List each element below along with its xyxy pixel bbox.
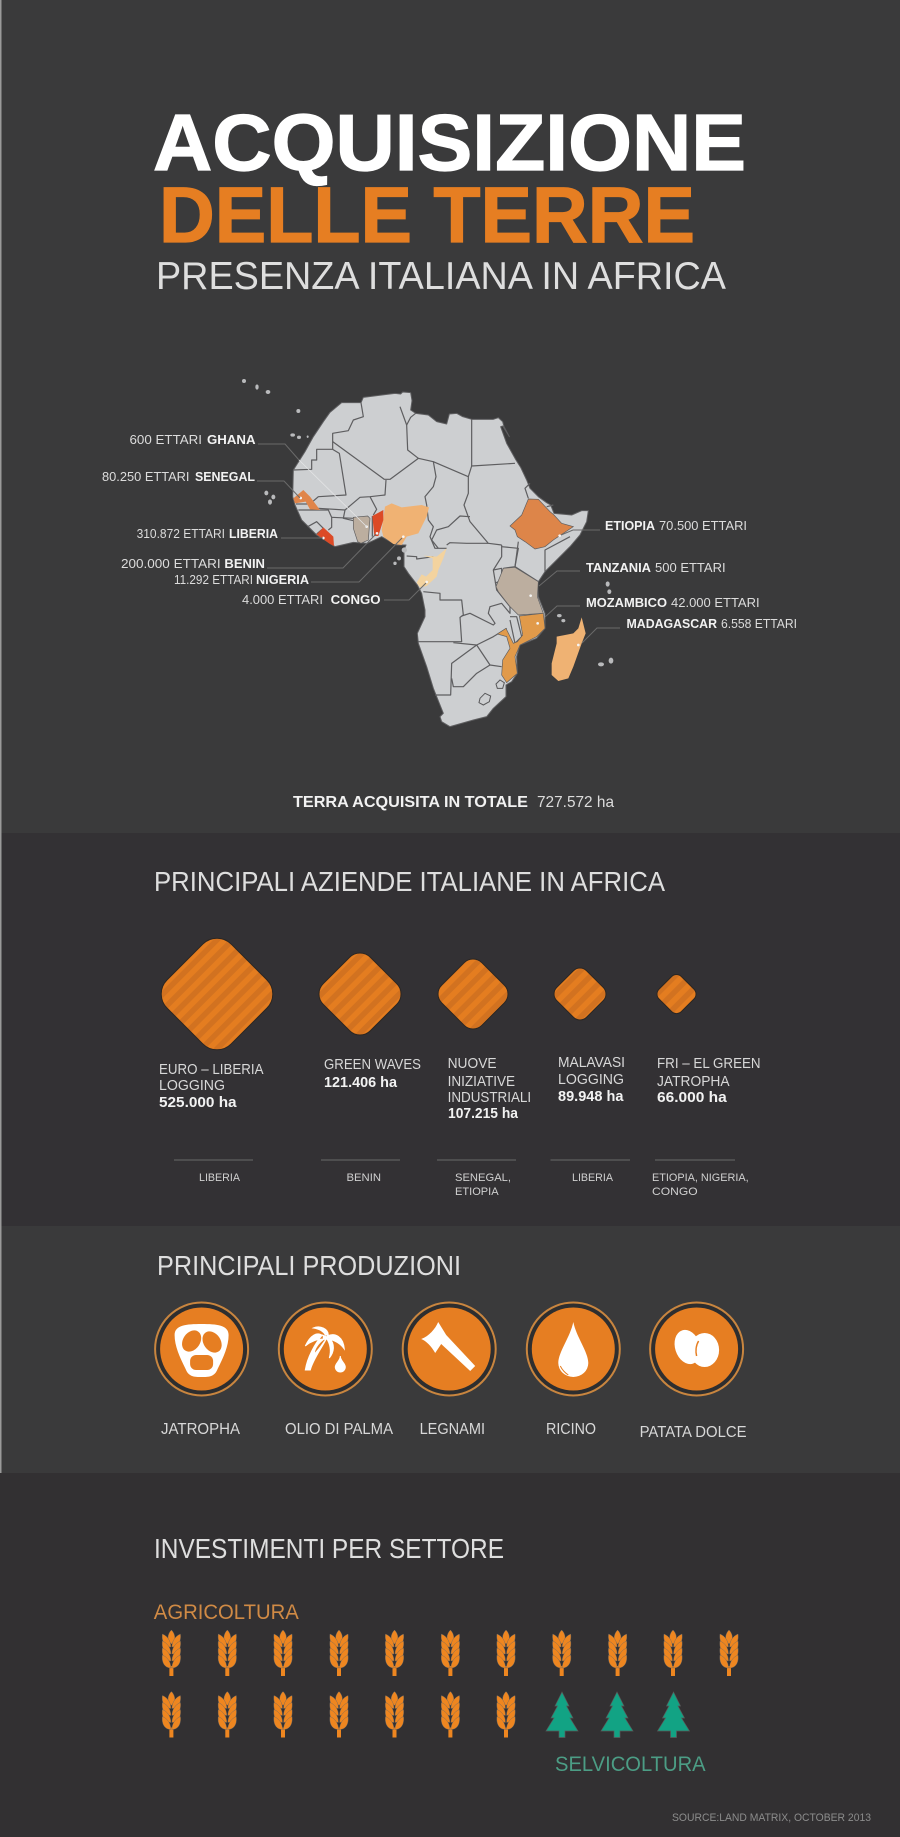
company: Fri-El Green Jatropha: JATROPHA	[657, 1073, 730, 1090]
title	[153, 98, 746, 298]
icon: palm oil	[279, 1302, 372, 1396]
map of Africa	[242, 379, 613, 727]
label: Congo: 4.000 ETTARI	[242, 592, 323, 607]
label: olio di palma: OLIO DI PALMA	[285, 1421, 393, 1438]
leader line: Benin	[267, 534, 376, 568]
company: Fri-El Green Jatropha: 66.000 ha	[657, 1089, 727, 1106]
heading: sectors: INVESTIMENTI PER SETTORE	[154, 1533, 504, 1564]
label: Senegal: 80.250 ETTARI	[102, 469, 190, 484]
label: Mozambico	[586, 595, 760, 610]
country borders	[293, 403, 570, 705]
Senegal	[293, 490, 320, 510]
label: Mozambico: MOZAMBICO	[586, 595, 667, 610]
company: Nuove Iniziative Industriali	[448, 1055, 531, 1122]
label: Ghana: GHANA	[207, 432, 256, 447]
label: agricoltura: AGRICOLTURA	[154, 1601, 299, 1624]
icon: castor oil drop	[527, 1302, 620, 1396]
islands	[242, 379, 613, 666]
left edge line	[0, 0, 2, 1473]
Ethiopia	[510, 499, 573, 549]
leader line: Etiopia	[561, 530, 600, 535]
leader line: Senegal	[257, 481, 300, 498]
Ghana	[353, 516, 370, 543]
leader line: Congo	[384, 583, 426, 600]
label: Benin	[121, 556, 265, 571]
label: Etiopia: ETIOPIA	[605, 518, 656, 533]
label: Congo	[242, 592, 381, 607]
company: Malavasi Logging: LOGGING	[558, 1071, 624, 1088]
label: Tanzania: TANZANIA	[586, 560, 652, 575]
country: Senegal, Etiopia	[455, 1172, 511, 1198]
label: ricino: RICINO	[546, 1421, 596, 1438]
Congo	[417, 548, 447, 587]
label: Liberia: 310.872 ETTARI	[137, 526, 225, 541]
country: Benin: BENIN	[346, 1172, 381, 1184]
label: Etiopia	[605, 518, 747, 533]
Benin	[372, 510, 383, 536]
label: Etiopia: 70.500 ETTARI	[659, 518, 747, 533]
leader line: Madagascar	[582, 628, 620, 643]
company: Euro-Liberia Logging	[159, 1061, 264, 1111]
country: Etiopia, Nigeria, Congo	[652, 1172, 749, 1198]
company: Green Waves: GREEN WAVES	[324, 1056, 421, 1073]
Liberia	[317, 527, 334, 546]
icon: jatropha	[155, 1302, 248, 1396]
label: Ghana	[130, 432, 256, 447]
company: Malavasi Logging	[558, 1054, 625, 1105]
label: selvicoltura: SELVICOLTURA	[555, 1753, 706, 1776]
location dots	[299, 497, 580, 646]
label: Senegal	[102, 469, 255, 484]
company: Euro-Liberia Logging: LOGGING	[159, 1077, 225, 1094]
title: DELLE TERRE	[159, 170, 695, 259]
leader line: Ghana over land	[299, 460, 367, 527]
country: Liberia: LIBERIA	[572, 1172, 614, 1184]
diamond: Nuove Iniziative Industriali	[433, 954, 513, 1034]
Nigeria	[382, 503, 429, 545]
company: Fri-El Green Jatropha	[657, 1055, 761, 1106]
icons: wheat row 2	[162, 1692, 515, 1738]
leader line: Liberia	[281, 537, 323, 539]
icon: axe	[403, 1302, 496, 1396]
country: Etiopia, Nigeria, Congo: CONGO	[652, 1186, 698, 1198]
icons: trees	[546, 1692, 690, 1738]
background: map section	[0, 0, 900, 833]
label: Benin: BENIN	[224, 556, 265, 571]
source: SOURCE:LAND MATRIX, OCTOBER 2013	[672, 1812, 871, 1824]
total land acquired: 727.572 ha	[537, 794, 614, 811]
label: Senegal: SENEGAL	[195, 469, 255, 484]
leader line: Ghana	[258, 444, 299, 460]
label: Madagascar: 6.558 ETTARI	[721, 616, 797, 631]
heading: productions: PRINCIPALI PRODUZIONI	[157, 1250, 461, 1281]
label: legnami: LEGNAMI	[420, 1421, 485, 1438]
label: Mozambico: 42.000 ETTARI	[671, 595, 760, 610]
country: Etiopia, Nigeria, Congo: ETIOPIA, NIGERIA,	[652, 1172, 749, 1184]
label: patata dolce: PATATA DOLCE	[640, 1424, 747, 1441]
label: Ghana: 600 ETTARI	[130, 432, 202, 447]
country: Senegal, Etiopia: ETIOPIA	[455, 1186, 499, 1198]
icon: sweet potato	[650, 1302, 743, 1396]
company: Nuove Iniziative Industriali: NUOVE	[448, 1055, 497, 1072]
title: ACQUISIZIONE	[153, 98, 746, 187]
leader line: Nigeria	[311, 538, 402, 582]
company: Green Waves: 121.406 ha	[324, 1074, 398, 1091]
country: Senegal, Etiopia: SENEGAL,	[455, 1172, 511, 1184]
label: Congo: CONGO	[331, 592, 381, 607]
company: Euro-Liberia Logging: EURO – LIBERIA	[159, 1061, 264, 1078]
Mozambique	[497, 613, 545, 683]
heading: companies: PRINCIPALI AZIENDE ITALIANE IN AFRICA	[154, 866, 665, 897]
total land acquired: TERRA ACQUISITA IN TOTALE	[293, 794, 528, 811]
diamond: Malavasi Logging	[550, 964, 610, 1024]
leader line: Mozambico	[545, 606, 580, 617]
background: companies section	[0, 833, 900, 1226]
land	[293, 392, 588, 727]
company: Malavasi Logging: MALAVASI	[558, 1054, 625, 1071]
label: Tanzania	[586, 560, 726, 575]
company: Malavasi Logging: 89.948 ha	[558, 1088, 624, 1105]
leader line: Tanzania	[539, 571, 580, 586]
country: Liberia: LIBERIA	[199, 1172, 241, 1184]
company: Nuove Iniziative Industriali: 107.215 ha	[448, 1105, 519, 1122]
label: Madagascar: MADAGASCAR	[626, 616, 718, 631]
company: Green Waves	[324, 1056, 421, 1091]
company: Fri-El Green Jatropha: FRI – EL GREEN	[657, 1055, 761, 1072]
Tanzania	[496, 567, 543, 615]
Madagascar	[552, 617, 586, 681]
label: Madagascar	[626, 616, 797, 631]
icons: wheat row 1	[162, 1630, 738, 1676]
diamond: Euro-Liberia Logging	[153, 930, 281, 1058]
diamond: Green Waves	[313, 947, 407, 1041]
company: Nuove Iniziative Industriali: INDUSTRIALI	[448, 1089, 531, 1106]
background: productions section	[0, 1226, 900, 1473]
label: Tanzania: 500 ETTARI	[655, 560, 726, 575]
label: Nigeria: NIGERIA	[256, 572, 310, 587]
label: Benin: 200.000 ETTARI	[121, 556, 221, 571]
label: jatropha: JATROPHA	[161, 1421, 240, 1438]
label: Liberia: LIBERIA	[229, 526, 279, 541]
label: Liberia	[137, 526, 279, 541]
diamond: Fri-El Green Jatropha	[654, 972, 699, 1016]
title: PRESENZA ITALIANA IN AFRICA	[156, 255, 726, 298]
label: Nigeria: 11.292 ETTARI	[174, 572, 253, 587]
background: sectors section	[0, 1473, 900, 1837]
company: Nuove Iniziative Industriali: INIZIATIVE	[448, 1073, 515, 1090]
label: Nigeria	[174, 572, 310, 587]
company: Euro-Liberia Logging: 525.000 ha	[159, 1094, 237, 1111]
